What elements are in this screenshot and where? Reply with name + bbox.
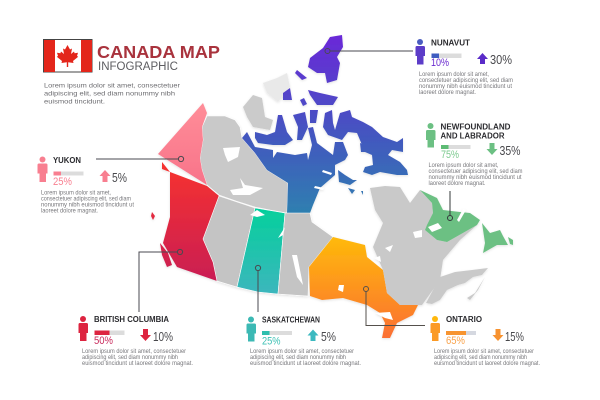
callout line: Ontario: [364, 286, 425, 326]
description: [250, 349, 361, 367]
description: adipiscing elit, sed diam nonummy nibh: [250, 355, 346, 361]
heading: AND LABRADOR: [440, 132, 505, 140]
description: euismod tincidunt ut laoreet dolore magnat.: [434, 361, 540, 367]
description: Lorem ipsum dolor sit amet, consectetuer: [82, 349, 186, 355]
value: 5%: [112, 171, 127, 185]
icon: person: [426, 123, 436, 148]
percentage: 25%: [53, 176, 72, 188]
description: nonummy nibh euismod tincidunt ut: [41, 202, 134, 208]
description: adipiscing elit, sed diam nonummy nibh: [82, 355, 178, 361]
region: Saskatchewan: [237, 208, 285, 294]
description: [41, 190, 134, 214]
region: Ontario: [309, 237, 418, 338]
region: British Columbia: [151, 162, 219, 281]
progress bar: [441, 145, 470, 149]
region: Newfoundland and Labrador: [420, 190, 513, 253]
value: 15%: [505, 330, 524, 344]
description: Lorem ipsum dolor sit amet,: [41, 190, 111, 196]
description: nonummy nibh euismod tincidunt ut: [419, 84, 512, 90]
icon: up arrow: [100, 170, 110, 182]
heading: ONTARIO: [446, 315, 482, 324]
panel: Nunavut: [415, 38, 513, 96]
icon: person: [415, 39, 425, 64]
description: nonummy nibh euismod tincidunt ut: [428, 175, 522, 181]
icon: person: [430, 316, 440, 341]
callout line: Nunavut: [325, 48, 413, 54]
callout line: Saskatchewan: [255, 265, 261, 312]
subheading: INFOGRAPHIC: [98, 61, 178, 73]
progress bar: [94, 330, 124, 335]
region: Quebec: [370, 186, 477, 305]
description: [419, 72, 513, 96]
region: Alberta: [203, 196, 255, 287]
heading: BRITISH COLUMBIA: [94, 315, 169, 324]
percentage: 65%: [446, 335, 465, 347]
intro text: euismod tincidunt.: [44, 98, 105, 106]
icon: up arrow: [308, 330, 318, 341]
icon: down arrow: [140, 329, 151, 341]
description: euismod tincidunt ut laoreet dolore magnat.: [82, 361, 193, 367]
icon: up arrow: [477, 53, 488, 64]
value: 30%: [490, 53, 512, 67]
panel: Ontario: [430, 315, 540, 367]
description: Lorem ipsum dolor sit amet, consectetuer: [250, 349, 354, 355]
description: [82, 349, 193, 367]
percentage: 50%: [94, 335, 113, 347]
percentage: 75%: [441, 149, 459, 161]
heading: NUNAVUT: [431, 38, 470, 48]
value: 5%: [321, 330, 336, 344]
percentage: 10%: [431, 57, 449, 69]
intro text: adipiscing elit, sed diam nonummy nibh: [44, 90, 175, 98]
icon: down arrow: [486, 143, 498, 155]
description: Lorem ipsum dolor sit amet,: [419, 72, 489, 78]
description: laoreet dolore magnat.: [41, 208, 98, 214]
icon: person: [246, 316, 256, 342]
panel: Newfoundland and Labrador: [426, 122, 522, 187]
description: [434, 349, 540, 367]
callout line: British Columbia: [139, 249, 183, 312]
icon: down arrow: [492, 329, 504, 341]
description: [428, 163, 522, 187]
progress bar: [262, 331, 292, 335]
value: 10%: [153, 330, 173, 344]
description: laoreet dolore magnat.: [428, 181, 486, 187]
percentage: 25%: [262, 336, 281, 348]
icon: person: [38, 156, 48, 182]
description: laoreet dolore magnat.: [419, 90, 476, 96]
intro text: Lorem ipsum dolor sit amet, consectetuer: [44, 82, 181, 90]
panel: Saskatchewan: [246, 316, 361, 367]
map of Canada: [151, 35, 513, 338]
region: Yukon: [158, 103, 207, 185]
panel: British Columbia: [78, 315, 193, 367]
icon: Canadian flag: [44, 40, 92, 72]
title block: [44, 40, 220, 106]
region: Arctic islands grey: [243, 73, 290, 130]
description: consectetuer adipiscing elit, sed diam: [419, 78, 513, 84]
icon: person: [78, 316, 88, 341]
description: Lorem ipsum dolor sit amet,: [428, 163, 499, 169]
heading: YUKON: [53, 156, 81, 165]
description: consectetuer adipiscing elit, sed diam: [41, 196, 131, 202]
panel: Yukon: [38, 156, 134, 214]
heading: SASKATCHEWAN: [262, 316, 320, 324]
description: adipiscing elit, sed diam nonummy nibh: [434, 355, 527, 361]
description: euismod tincidunt ut laoreet dolore magnat.: [250, 361, 361, 367]
callout line: Yukon: [96, 156, 184, 162]
heading: NEWFOUNDLAND: [440, 122, 511, 132]
progress bar: [54, 172, 84, 176]
heading: [440, 122, 511, 140]
progress bar: [432, 54, 462, 58]
lakes and inlets: [223, 147, 466, 320]
region: Nunavut: [242, 35, 408, 213]
region: Maritimes: [426, 268, 488, 304]
intro text: [44, 82, 181, 106]
description: consectetuer adipiscing elit, sed diam: [428, 169, 522, 175]
heading: CANADA MAP: [97, 42, 220, 62]
callout line: Newfoundland and Labrador: [448, 191, 452, 220]
description: Lorem ipsum dolor sit amet, consectetuer: [434, 349, 534, 355]
region: Manitoba: [278, 213, 333, 296]
region: Northwest Territories: [200, 116, 288, 213]
value: 35%: [500, 144, 520, 158]
progress bar: [446, 331, 476, 335]
